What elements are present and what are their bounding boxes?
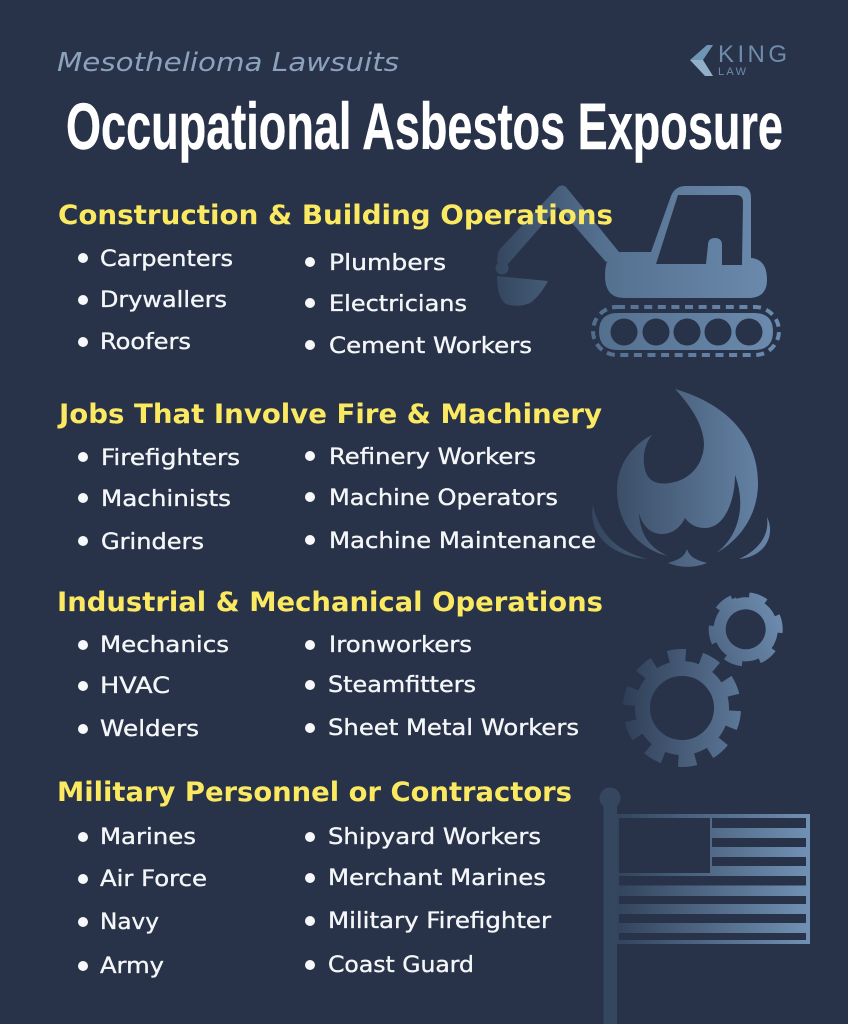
icon: american flag <box>600 788 810 1024</box>
list: right column <box>305 633 579 741</box>
small gear <box>702 586 789 673</box>
list: left column: Machinists <box>101 487 231 512</box>
list: left column: Carpenters <box>100 247 233 272</box>
flag cloth <box>617 814 810 944</box>
list: left column: Firefighters <box>101 446 240 471</box>
list: left column: Welders <box>100 717 199 742</box>
heading: Jobs That Involve Fire & Machinery <box>57 399 602 430</box>
list: right column: Machine Maintenance <box>329 529 596 554</box>
icon: flame <box>592 389 770 567</box>
list: right column <box>305 825 552 978</box>
list: right column: Shipyard Workers <box>328 825 541 850</box>
panel: construction and building operations <box>58 200 613 359</box>
list: right column: Sheet Metal Workers <box>328 716 579 741</box>
list: right column <box>305 251 532 359</box>
icon: gears <box>628 586 789 762</box>
list: right column: Cement Workers <box>329 334 532 359</box>
list: right column: Ironworkers <box>329 633 472 658</box>
list: right column: Merchant Marines <box>328 866 546 891</box>
list: right column: Military Firefighter <box>328 909 552 934</box>
logo: King Law <box>690 41 787 78</box>
list: right column: Plumbers <box>329 251 446 276</box>
list: left column <box>78 825 207 979</box>
subtitle: Mesothelioma Lawsuits <box>57 48 399 78</box>
icon: excavator <box>496 186 779 355</box>
list: right column: Coast Guard <box>328 953 474 978</box>
list: right column: Electricians <box>329 292 467 317</box>
list: right column <box>305 445 596 554</box>
heading: Military Personnel or Contractors <box>57 777 572 808</box>
panel: military personnel or contractors <box>57 777 572 979</box>
list: left column <box>78 633 229 742</box>
list: left column: Grinders <box>101 530 204 555</box>
list: right column: Refinery Workers <box>329 445 536 470</box>
heading: Construction & Building Operations <box>58 200 613 231</box>
list: left column: Navy <box>100 910 159 935</box>
logo: King Law: LAW <box>718 66 747 78</box>
list: right column: Machine Operators <box>329 486 558 511</box>
list: left column <box>78 247 233 355</box>
list: left column: Air Force <box>100 867 207 892</box>
list: left column: Drywallers <box>100 288 227 313</box>
list: left column: Mechanics <box>100 633 229 658</box>
list: right column: Steamfitters <box>328 673 476 698</box>
list: left column: Roofers <box>100 330 191 355</box>
panel: industrial and mechanical operations <box>57 587 603 742</box>
panel: jobs that involve fire and machinery <box>57 399 602 555</box>
flag pole <box>600 788 620 1024</box>
list: left column: Marines <box>100 825 196 850</box>
logo: King Law: KING <box>718 41 787 68</box>
large gear <box>628 654 736 762</box>
heading: Industrial & Mechanical Operations <box>57 587 603 618</box>
list: left column: Army <box>100 954 164 979</box>
list: left column <box>78 446 240 555</box>
list: left column: HVAC <box>100 674 170 699</box>
